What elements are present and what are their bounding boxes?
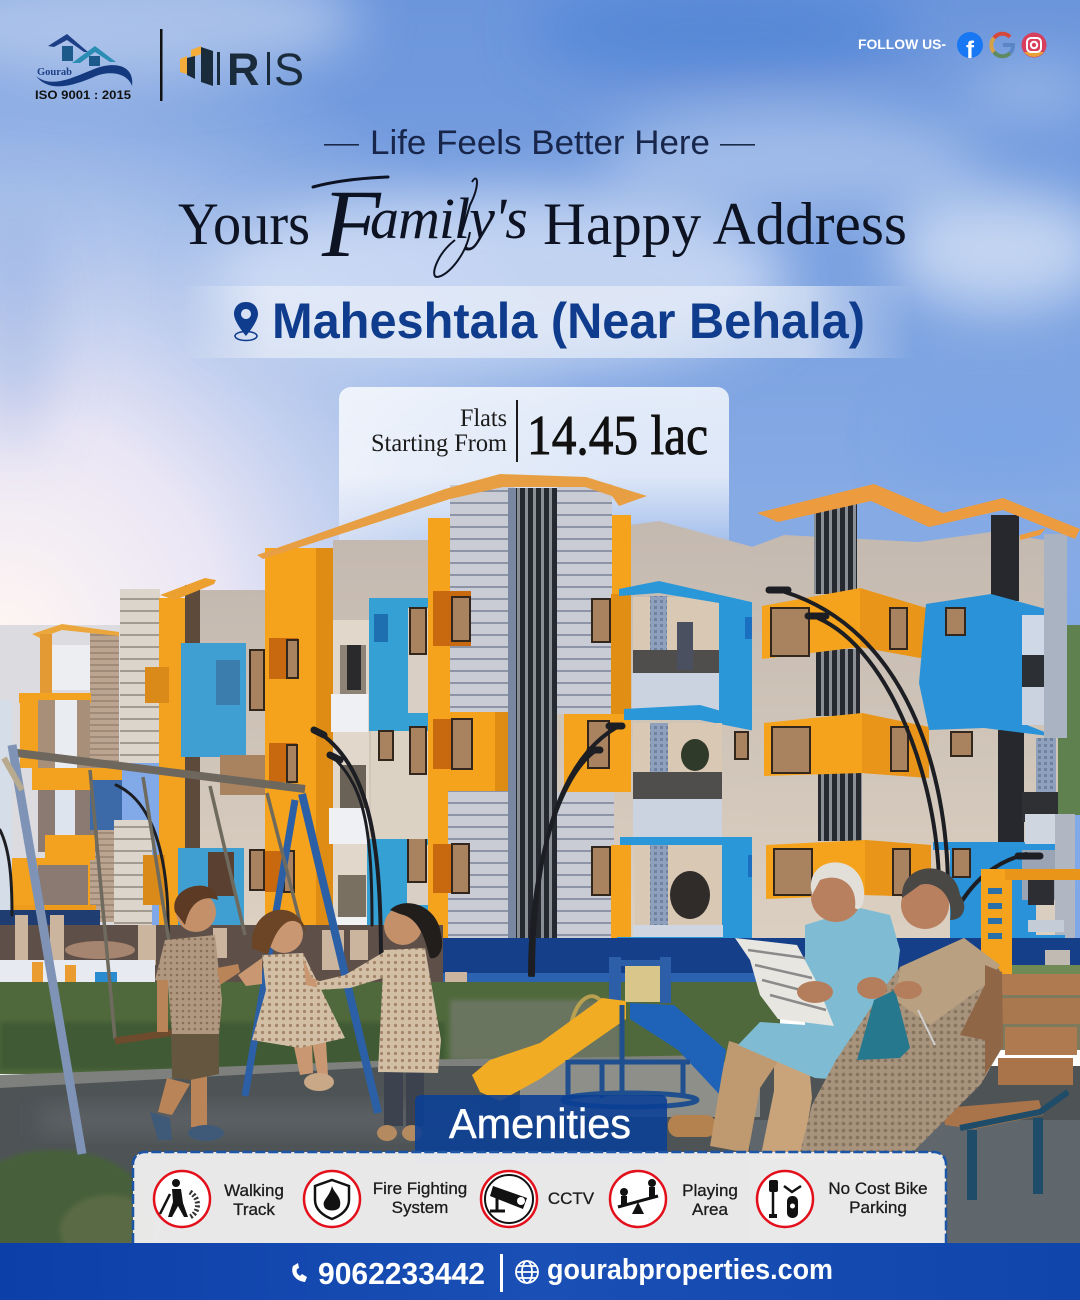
icon: globe: [516, 1261, 538, 1283]
amenity: walking track: [154, 1171, 284, 1227]
icon: facebook: f: [966, 37, 975, 64]
amenities panel: [133, 1095, 946, 1243]
street lamps: [0, 590, 1040, 975]
girl with pigtail: [316, 903, 442, 1141]
website: gourabproperties.com: [547, 1254, 833, 1286]
second building left: [114, 578, 265, 929]
garden hedge and ground: [0, 982, 1080, 1265]
price caption: Flats: [460, 405, 507, 432]
right wing building: [617, 521, 764, 949]
divider: [160, 29, 162, 101]
boy: [150, 886, 240, 1141]
icon: facebook: [957, 32, 983, 64]
park bench: [943, 974, 1080, 1200]
logo: Gourab: ISO 9001 : 2015: [35, 88, 131, 102]
amenity: bike parking: [757, 1171, 928, 1227]
logo: Iris: R: [227, 44, 260, 95]
headline: [178, 170, 907, 277]
grandmother knitting: [798, 868, 1003, 1160]
amenity: walking track: Track: [233, 1200, 275, 1219]
logo: Gourab: Gourab: [37, 67, 72, 78]
location band: [180, 286, 915, 358]
icon: phone: [292, 1263, 307, 1282]
stilts and fence level: [0, 910, 1080, 995]
amenity: walking track: Walking: [224, 1181, 284, 1200]
grandfather reading newspaper: [710, 862, 900, 1160]
playground slide: [472, 957, 726, 1137]
amenity: fire fighting: [304, 1171, 467, 1227]
price caption: [371, 405, 508, 457]
amenity: cctv: CCTV: [548, 1189, 595, 1208]
amenity: bike parking: Parking: [849, 1198, 907, 1217]
sky background: [0, 0, 1080, 1000]
price caption: Starting From: [371, 430, 508, 457]
amenity: playing area: Area: [692, 1200, 728, 1219]
follow us text: FOLLOW US-: [858, 37, 946, 52]
phone number: 9062233442: [318, 1256, 485, 1291]
amenity: fire fighting: System: [392, 1198, 448, 1217]
location text: Maheshtala (Near Behala): [272, 293, 865, 349]
amenity: fire fighting: Fire Fighting: [373, 1179, 467, 1198]
top logos: [35, 29, 304, 102]
icon: instagram: [1022, 32, 1046, 58]
swing set: [4, 745, 378, 1154]
amenities heading: Amenities: [449, 1100, 631, 1147]
footer bar: [0, 1243, 1080, 1300]
amenities card: [133, 1152, 946, 1243]
amenity: bike parking: No Cost Bike: [828, 1179, 928, 1198]
amenity: playing area: [610, 1171, 738, 1227]
amenity: playing area: Playing: [682, 1181, 738, 1200]
girl on swing: [238, 910, 345, 1091]
price panel: [339, 387, 729, 640]
follow us social: [858, 32, 1046, 64]
headline: Happy Address: [543, 191, 907, 257]
logo: Iris: [180, 44, 304, 95]
main apartment building: [257, 474, 647, 943]
headline: F: [321, 170, 382, 277]
amenity: cctv: [481, 1171, 595, 1227]
headline: Yours: [178, 191, 310, 257]
logo: Gourab: [35, 34, 132, 102]
tagline: Life Feels Better Here: [370, 124, 710, 162]
logo: Iris: S: [274, 44, 304, 95]
right apartment block: [752, 484, 1080, 952]
icon: location pin: [234, 302, 258, 340]
icon: google: [991, 34, 1013, 56]
orange frame right: [981, 869, 1080, 989]
price value: 14.45 lac: [527, 405, 708, 467]
amenities heading: [415, 1095, 667, 1163]
headline: amily's: [370, 186, 527, 251]
background building far left: [0, 624, 122, 970]
